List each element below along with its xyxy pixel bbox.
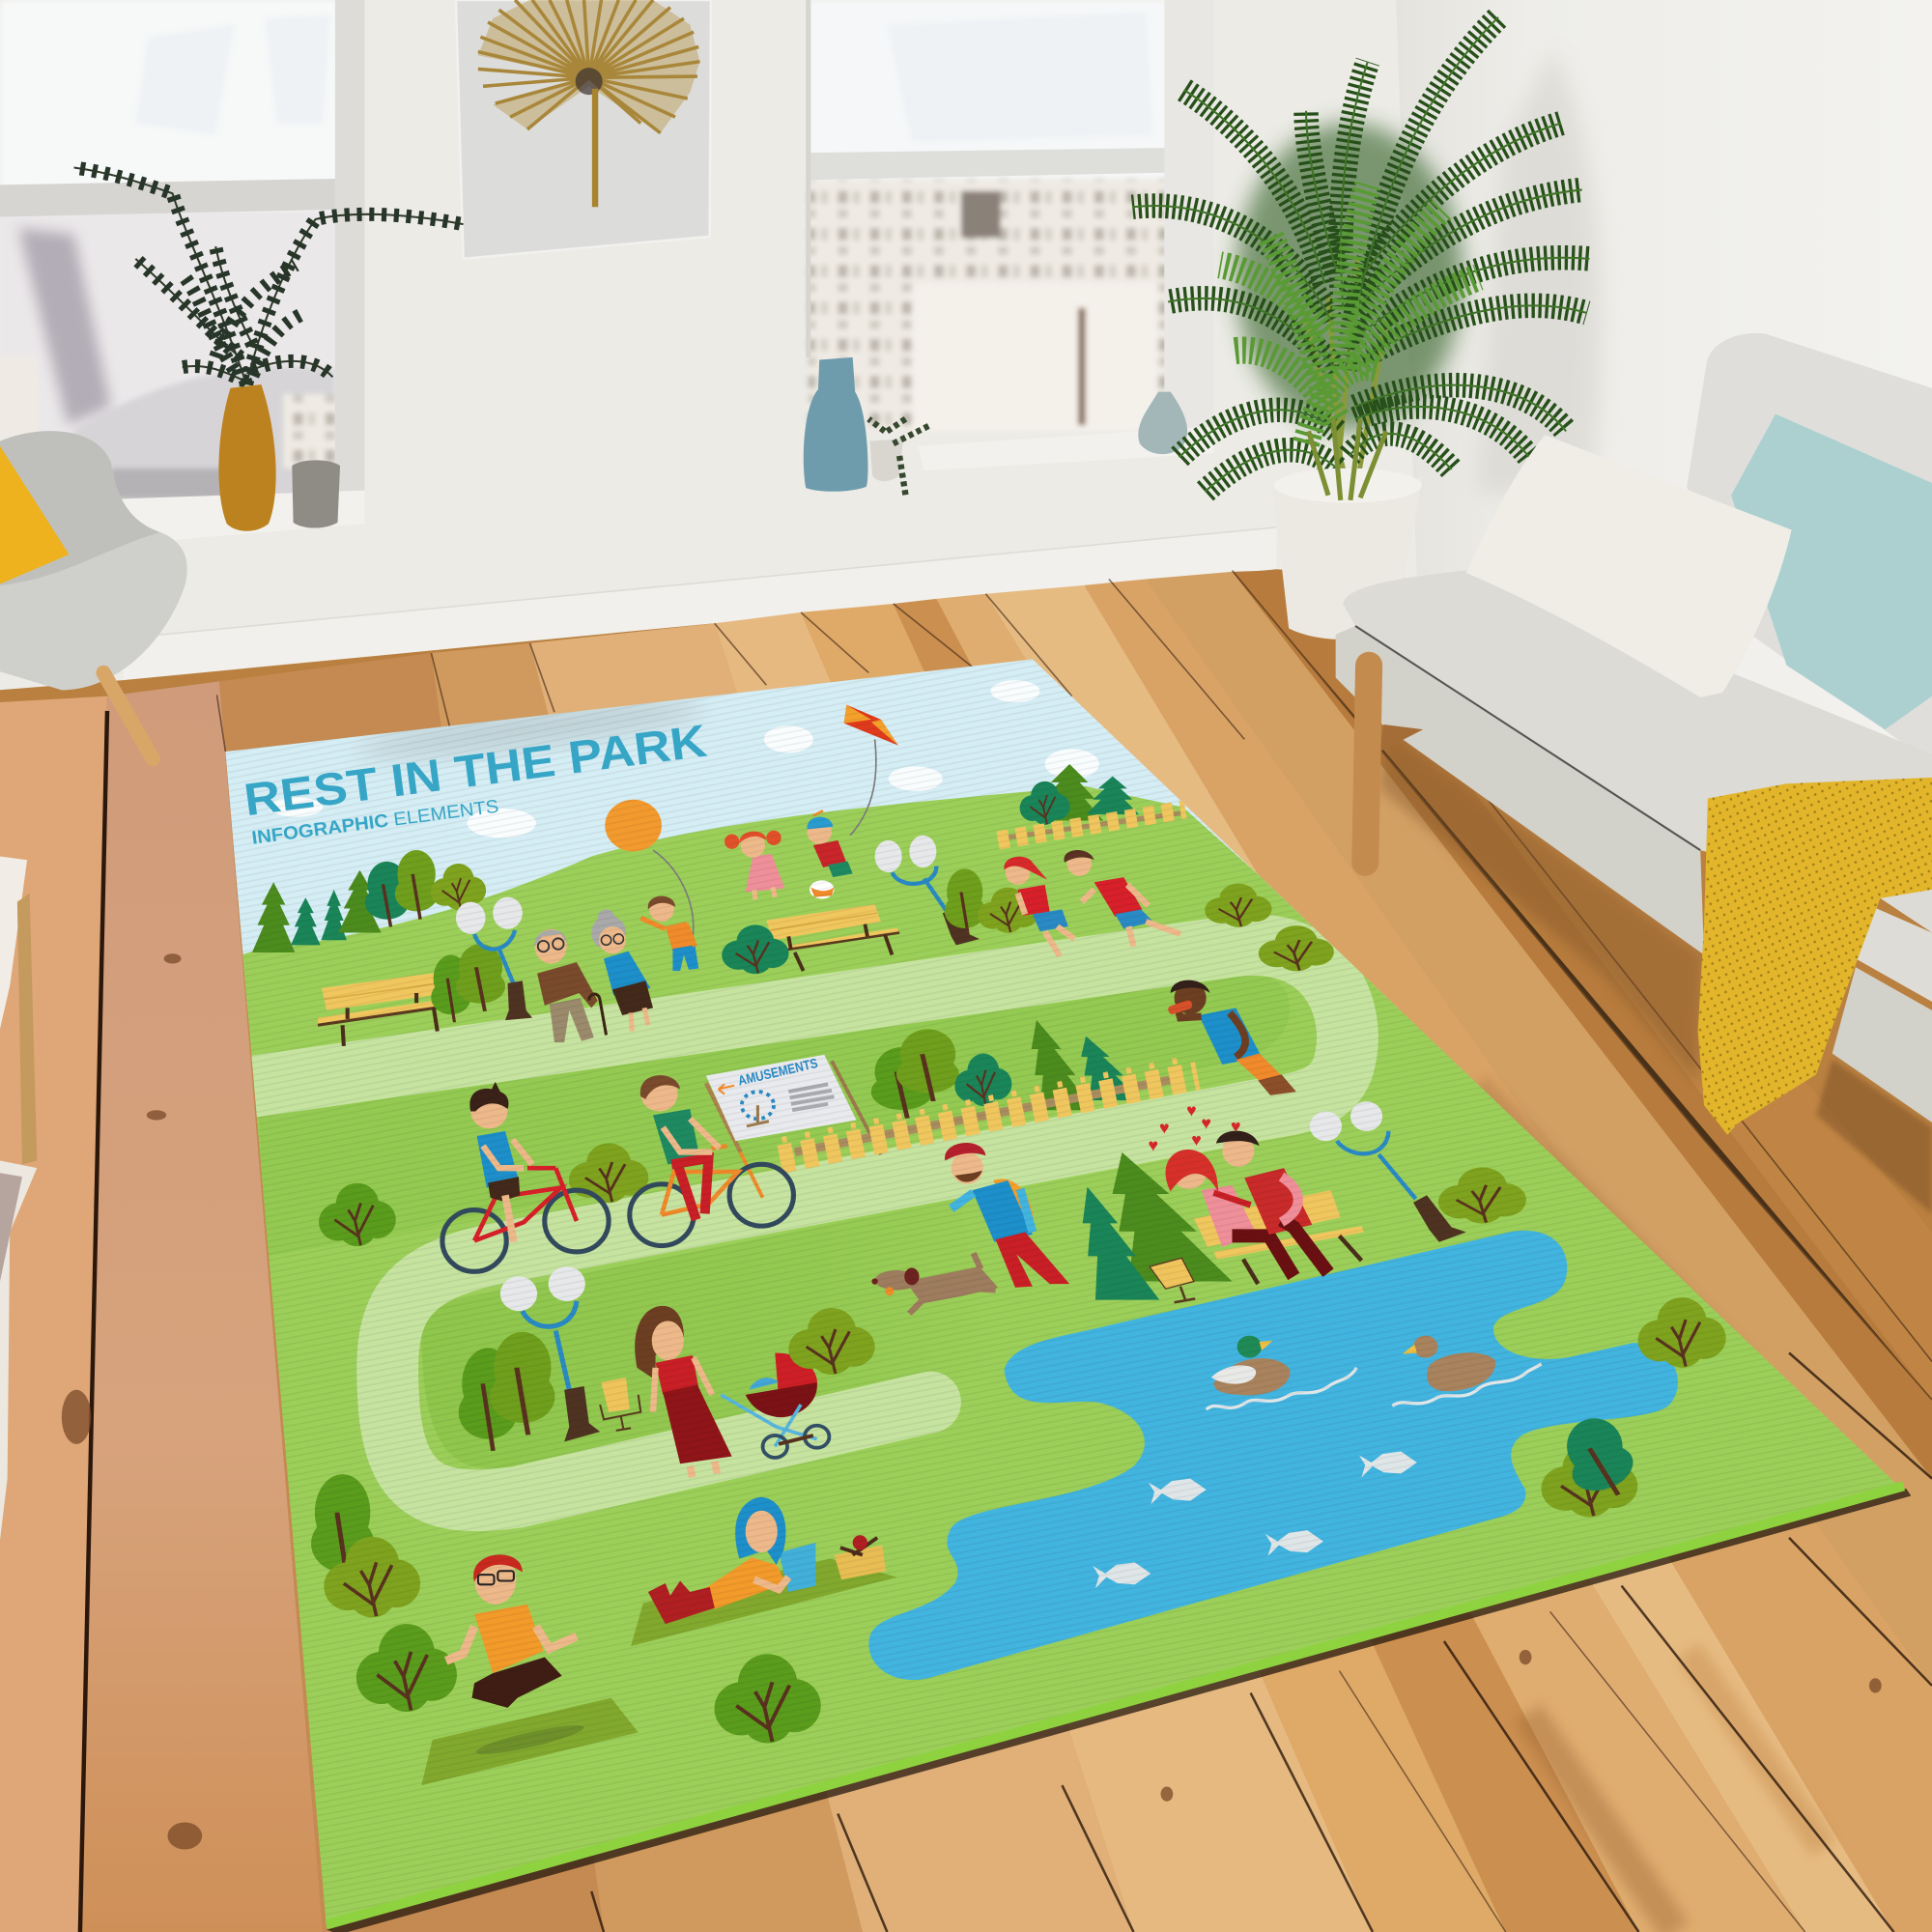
- side table: [0, 856, 37, 1540]
- trees behind fence: [871, 1020, 1141, 1119]
- boy with balloon: [640, 896, 698, 971]
- old woman: [591, 909, 653, 1032]
- bush near bench: [722, 924, 789, 974]
- subtitle: INFOGRAPHIC ELEMENTS: [250, 797, 500, 849]
- beach ball: [810, 880, 835, 898]
- near planks: [715, 612, 1373, 1932]
- left vase and branches: [74, 167, 464, 531]
- upper right trees: [1020, 764, 1139, 825]
- sofa: [1336, 333, 1932, 1213]
- wooden floor: [0, 569, 1932, 1932]
- palm shadow on wall: [1479, 49, 1602, 493]
- bush lower middle: [715, 1654, 821, 1744]
- hearts: ♥: [1201, 1113, 1211, 1132]
- sofa lower base: [1336, 626, 1704, 955]
- mother in red dress: [635, 1306, 732, 1477]
- pines by couple: [1055, 1152, 1233, 1300]
- hearts: [1149, 1101, 1241, 1154]
- upper left tree cluster: [252, 850, 486, 952]
- ducks and waves: [1207, 1336, 1542, 1409]
- sill vases: [804, 357, 1187, 496]
- girl with ice cream: [724, 831, 784, 899]
- lamp by couple: [1310, 1101, 1466, 1242]
- far planks: [219, 653, 604, 1932]
- amusements sign: AMUSEMENTS: [736, 1055, 819, 1089]
- old man: [534, 929, 607, 1042]
- bush by stroller: [788, 1308, 875, 1375]
- lamp top middle: [875, 836, 980, 945]
- second cyclist: [630, 1075, 793, 1246]
- bush left: [319, 1183, 396, 1246]
- sofa leg: [1365, 666, 1423, 863]
- bush right of lamp: [1438, 1167, 1526, 1224]
- hiker: [945, 1143, 1069, 1288]
- kite: [844, 705, 898, 836]
- bush near bikes: [569, 1143, 648, 1203]
- rug shadow: [327, 1489, 1911, 1932]
- white pillow: [1466, 435, 1792, 697]
- trees lower left: [311, 1474, 457, 1712]
- yellow knitted blanket: [1698, 778, 1932, 1135]
- clouds: [269, 680, 1099, 838]
- walking path: [234, 945, 1348, 1500]
- hearts: ♥: [1159, 1118, 1170, 1137]
- title: REST IN THE PARK: [242, 716, 710, 826]
- framed poster with golden palm leaf: [456, 0, 711, 259]
- bench top middle: [766, 904, 899, 971]
- sofa back: [1687, 333, 1932, 764]
- balloon: [605, 800, 694, 939]
- green hill and meadow: [185, 786, 1932, 1932]
- knots: [62, 953, 1882, 1850]
- small sign by pines: [1150, 1258, 1195, 1302]
- meditating person: [446, 1554, 577, 1708]
- sky: [226, 659, 1401, 1010]
- room background: [0, 0, 1932, 764]
- couple on bench: [1166, 1131, 1364, 1284]
- left planks: [0, 696, 107, 1932]
- amusements sign: [706, 1055, 881, 1198]
- waves: [1207, 1368, 1356, 1409]
- upper right fence: [998, 810, 1185, 840]
- stroller: [721, 1353, 829, 1458]
- rug ribbing: [185, 640, 1932, 1932]
- grey armchair with yellow cushion: [0, 431, 187, 759]
- blue pillow: [1731, 414, 1932, 729]
- mallard duck: [1211, 1336, 1290, 1395]
- sofa seat cushion: [1343, 569, 1932, 933]
- trees by runners: [945, 868, 1038, 936]
- middle fence: [778, 1057, 1198, 1159]
- girl reading: [648, 1497, 815, 1624]
- floor streaks: [1479, 1084, 1749, 1368]
- hearts: ♥: [1186, 1101, 1197, 1121]
- brown duck: [1403, 1336, 1495, 1391]
- picnic blanket: [631, 1559, 897, 1646]
- hearts: ♥: [1149, 1135, 1158, 1154]
- lamp and trees left: [431, 897, 532, 1022]
- plant pot: [1273, 474, 1423, 639]
- hearts: ♥: [1191, 1130, 1202, 1150]
- woman in pink: [1166, 1150, 1293, 1276]
- running woman: [1004, 857, 1074, 956]
- man in red: [1216, 1131, 1328, 1273]
- grey worn patch: [365, 699, 696, 763]
- lower lamp and trees: [459, 1266, 600, 1451]
- left window: [0, 0, 365, 542]
- right wall: [1396, 0, 1932, 764]
- plank gaps: [80, 711, 107, 1932]
- lower lawn inside the loop: [421, 1242, 748, 1468]
- picnic basket: [835, 1535, 886, 1579]
- hearts: ♥: [1231, 1117, 1241, 1136]
- sofa shadow: [1380, 725, 1704, 1084]
- upper lawn between paths: [259, 972, 1290, 1257]
- bench top left: [318, 972, 452, 1046]
- pond: [868, 1231, 1678, 1680]
- potted palm plant: [1132, 17, 1589, 639]
- left wall: [0, 0, 1405, 690]
- chair leg: [103, 672, 153, 759]
- bushes right: [1205, 884, 1334, 971]
- dog: [871, 1253, 998, 1314]
- boy flying kite: [807, 810, 853, 877]
- man eating hot dog: [1167, 980, 1296, 1095]
- fish: [1093, 1452, 1417, 1588]
- rug bright edge: [327, 1486, 1904, 1924]
- sofa right end: [1833, 907, 1932, 1122]
- first cyclist: [442, 1082, 609, 1271]
- small sign lower: [600, 1378, 640, 1431]
- running man: [1064, 850, 1180, 947]
- meditation mat: [421, 1698, 639, 1785]
- rug artwork: [185, 640, 1932, 1932]
- trees right of pond: [1542, 1297, 1726, 1517]
- middle window: [806, 0, 1213, 470]
- rug: [185, 640, 1932, 1932]
- baseboard: [124, 527, 1276, 680]
- palm foliage mass: [1132, 17, 1589, 493]
